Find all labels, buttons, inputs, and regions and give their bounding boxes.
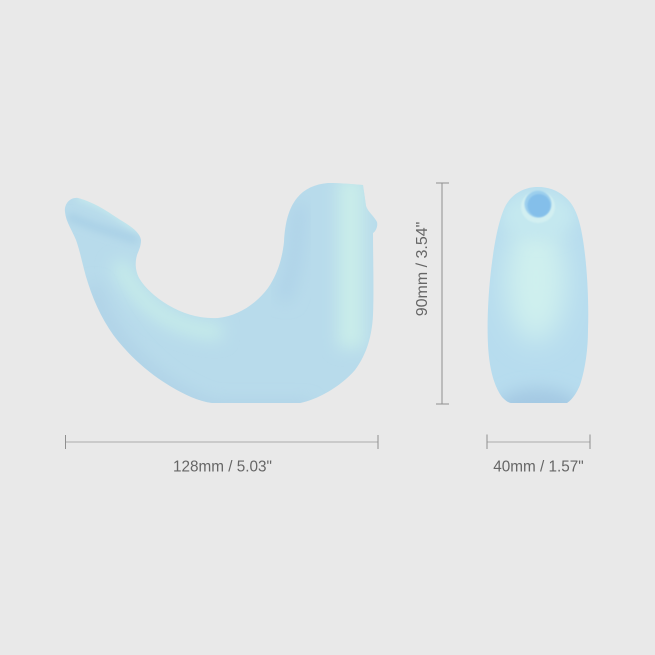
height label: 90mm / 3.54" [414,222,431,316]
width dimension line: side view [66,435,378,449]
height dimension line [436,183,449,404]
dimension diagram [64,182,590,472]
icon: suction opening [521,190,555,223]
width label: side view: 128mm / 5.03" [173,458,272,476]
product side view [65,178,377,408]
product front view [488,187,588,403]
width label: front view: 40mm / 1.57" [493,458,584,476]
width dimension line: front view [487,434,590,449]
